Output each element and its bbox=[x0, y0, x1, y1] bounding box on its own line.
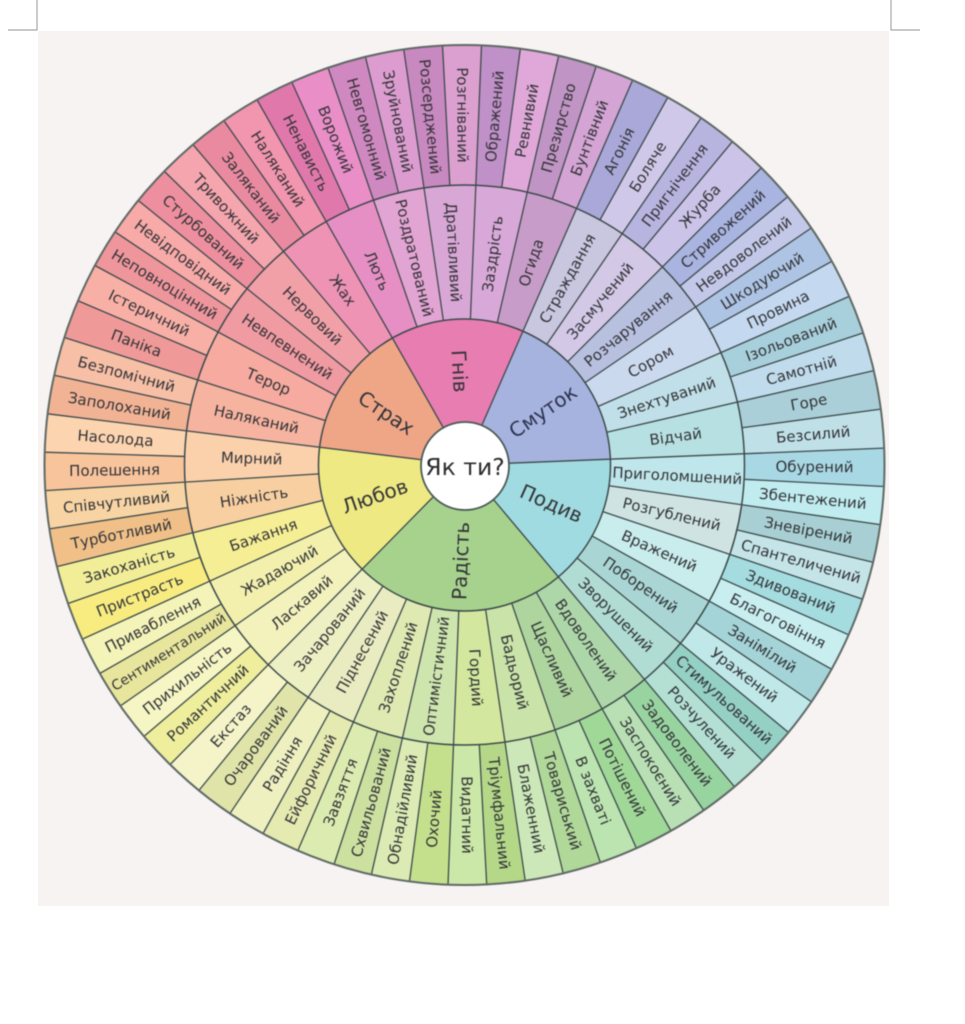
cell: Схвильований bbox=[334, 729, 409, 875]
cell: Невдоволений bbox=[676, 196, 812, 312]
cell: Бадьорий: Бадьорий bbox=[497, 633, 532, 712]
cell: Розчулений: Розчулений bbox=[664, 683, 739, 763]
sector: Любов bbox=[305, 404, 486, 574]
cell: Спантеличений bbox=[728, 523, 874, 600]
cell: Жадаючий bbox=[208, 514, 351, 627]
cell: Тривожний: Тривожний bbox=[188, 169, 263, 248]
cell: В захваті: В захваті bbox=[571, 754, 614, 827]
cell: Спантеличений: Спантеличений bbox=[739, 536, 863, 587]
cell: Стимульований: Стимульований bbox=[672, 652, 776, 748]
cell: Засмучений: Засмучений bbox=[563, 259, 637, 343]
cell: Ніжність: Ніжність bbox=[219, 483, 289, 512]
cell: Приголомшений bbox=[608, 446, 745, 506]
cell: Страждання bbox=[512, 207, 623, 351]
sector: Подив: Подив bbox=[516, 479, 586, 528]
cell: Видатний: Видатний bbox=[458, 776, 476, 854]
cell: Невдоволений: Невдоволений bbox=[693, 212, 795, 296]
cell: Невпевнений: Невпевнений bbox=[238, 310, 336, 384]
cell: Насолода bbox=[44, 413, 187, 463]
cell: Розчарування: Розчарування bbox=[581, 287, 676, 371]
cell: Нервовий bbox=[246, 250, 379, 382]
cell: Заспокоєний bbox=[596, 691, 704, 831]
cell: Провина: Провина bbox=[744, 287, 812, 333]
cell: Відчай: Відчай bbox=[648, 424, 703, 449]
cell: Журба: Журба bbox=[676, 180, 725, 232]
cell: Невгомонний bbox=[328, 56, 405, 202]
cell: Агонія bbox=[571, 80, 668, 223]
cell: Заляканий: Заляканий bbox=[218, 149, 284, 227]
cell: Істеричний: Істеричний bbox=[106, 286, 193, 340]
cell: Сором bbox=[579, 306, 722, 418]
cell: Ворожий: Ворожий bbox=[314, 103, 357, 176]
cell: Прихильність: Прихильність bbox=[139, 639, 235, 719]
cell: Товариський: Товариський bbox=[539, 749, 585, 852]
sector: Гнів bbox=[392, 316, 530, 468]
cell: Стимульований bbox=[659, 638, 789, 762]
cell: Презирство bbox=[521, 55, 597, 201]
cell: Обнадійливий: Обнадійливий bbox=[384, 753, 421, 866]
cell: Самотній bbox=[728, 333, 874, 409]
cell: Знехтуваний bbox=[594, 352, 739, 444]
cell: В захваті bbox=[549, 718, 637, 863]
cell: Потішений: Потішений bbox=[595, 735, 650, 820]
cell: Ейфоричний: Ейфоричний bbox=[281, 731, 341, 828]
cell: Заляканий bbox=[193, 120, 309, 256]
cell: Тріумфальний bbox=[472, 741, 526, 885]
middle ring of feelings bbox=[184, 184, 746, 746]
cell: Вражений bbox=[587, 500, 731, 602]
cell: Екстаз bbox=[169, 660, 293, 791]
sector: Смуток: Смуток bbox=[504, 380, 581, 443]
cell: Зневірений bbox=[736, 498, 881, 563]
cell: Обурений bbox=[744, 447, 885, 487]
cell: Очарований bbox=[198, 678, 314, 814]
cell: Стривожений: Стривожений bbox=[677, 186, 769, 272]
cell: Тріумфальний: Тріумфальний bbox=[484, 755, 514, 870]
cell: Вдоволений: Вдоволений bbox=[551, 596, 621, 685]
cell: Уражений bbox=[676, 617, 812, 733]
cell: Роздратований bbox=[373, 187, 456, 330]
cell: Безпомічний: Безпомічний bbox=[76, 353, 177, 396]
cell: Романтичний bbox=[143, 641, 273, 765]
cell: Невідповідний bbox=[115, 200, 251, 315]
cell: Неповноцінний bbox=[94, 232, 235, 338]
cell: Бунтівний bbox=[546, 66, 633, 211]
cell: Зруйнований: Зруйнований bbox=[379, 69, 417, 174]
cell: Романтичний: Романтичний bbox=[163, 661, 253, 746]
cell: Неповноцінний: Неповноцінний bbox=[108, 246, 221, 323]
cell: Турботливий bbox=[49, 501, 194, 567]
cell: Завзяття bbox=[297, 720, 384, 865]
cell: Заздрість bbox=[458, 184, 528, 324]
cell: Роздратований: Роздратований bbox=[391, 197, 437, 319]
cell: Огида: Огида bbox=[515, 237, 548, 289]
cell: Зневірений: Зневірений bbox=[763, 513, 854, 548]
cell: Співчутливий: Співчутливий bbox=[62, 488, 171, 517]
cell: Видатний bbox=[447, 745, 487, 885]
cell: Ізольований bbox=[719, 296, 864, 383]
outer ring of feelings bbox=[44, 45, 885, 885]
cell: Ейфоричний bbox=[262, 708, 360, 851]
cell: Захоплений bbox=[353, 595, 444, 739]
cell: Розгніваний: Розгніваний bbox=[453, 67, 472, 163]
cell: Страждання: Страждання bbox=[536, 231, 600, 327]
sector: Страх bbox=[307, 329, 501, 520]
cell: Ненависть bbox=[257, 82, 355, 225]
background panel bbox=[38, 31, 889, 906]
cell: Ласкавий bbox=[234, 539, 371, 666]
cell: Ізольований: Ізольований bbox=[743, 314, 840, 365]
cell: Ніжність bbox=[184, 461, 325, 534]
cell: Заспокоєний: Заспокоєний bbox=[616, 714, 685, 809]
cell: Потішений bbox=[573, 706, 672, 849]
cell: Задоволений bbox=[618, 675, 735, 811]
cell: Оптимістичний: Оптимістичний bbox=[420, 615, 453, 737]
sector: Радість: Радість bbox=[447, 521, 474, 600]
cell: Лють: Лють bbox=[360, 248, 394, 293]
cell: Приголомшений: Приголомшений bbox=[612, 464, 743, 488]
cell: Завзяття: Завзяття bbox=[320, 756, 362, 829]
cell: Співчутливий bbox=[45, 475, 189, 529]
crop mark: top right bbox=[891, 0, 920, 30]
cell: Радіння bbox=[229, 694, 336, 834]
cell: Благоговіння: Благоговіння bbox=[727, 590, 829, 652]
sector: Радість bbox=[361, 461, 563, 615]
cell: Жах: Жах bbox=[325, 271, 360, 310]
cell: Захоплений: Захоплений bbox=[375, 620, 422, 715]
sector: Гнів: Гнів bbox=[446, 349, 473, 393]
cell: Вдоволений bbox=[526, 569, 646, 710]
cell: Задоволений: Задоволений bbox=[638, 696, 716, 790]
cell: Стурбований: Стурбований bbox=[159, 191, 248, 273]
cell: Здивований bbox=[718, 548, 863, 636]
cell: Радіння: Радіння bbox=[259, 733, 306, 795]
cell: Бажання: Бажання bbox=[227, 515, 300, 555]
cell: Заздрість: Заздрість bbox=[479, 215, 507, 293]
cell: Дратівливий bbox=[424, 184, 483, 321]
inner ring of core emotions bbox=[305, 316, 629, 615]
cell: Жах bbox=[283, 220, 403, 361]
cell: Поборений bbox=[570, 525, 711, 645]
cell: Товариський bbox=[524, 728, 601, 874]
cell: Безсилий: Безсилий bbox=[775, 422, 851, 447]
cell: Пристрасть bbox=[67, 551, 212, 640]
cell: Горе bbox=[736, 370, 881, 434]
cell: Приваблення bbox=[82, 575, 225, 674]
cell: Невгомонний: Невгомонний bbox=[343, 76, 390, 182]
cell: Охочий bbox=[409, 742, 460, 885]
cell: Безпомічний bbox=[54, 337, 199, 412]
cell: Прихильність bbox=[120, 620, 255, 737]
cell: Щасливий: Щасливий bbox=[527, 618, 577, 700]
cell: Щасливий bbox=[500, 587, 603, 731]
cell: Піднесений: Піднесений bbox=[332, 607, 392, 696]
cell: Огида bbox=[485, 191, 577, 335]
crop mark: top left bbox=[8, 0, 37, 30]
cell: Охочий: Охочий bbox=[423, 789, 446, 848]
cell: Наляканий (middle): Наляканий bbox=[212, 401, 301, 438]
cell: Вражений: Вражений bbox=[619, 527, 700, 576]
cell: Боляче: Боляче bbox=[626, 138, 670, 196]
cell: Терор: Терор bbox=[243, 364, 293, 399]
cell: Пристрасть: Пристрасть bbox=[94, 570, 186, 621]
cell: Шкодуючий: Шкодуючий bbox=[717, 249, 807, 314]
cell: Заполоханий: Заполоханий bbox=[67, 389, 172, 424]
cell: Обнадійливий bbox=[371, 737, 435, 882]
cell: Невідповідний: Невідповідний bbox=[131, 216, 235, 299]
cell: Зачарований bbox=[267, 561, 393, 699]
cell: Бадьорий bbox=[473, 600, 556, 743]
sector: Любов: Любов bbox=[339, 474, 411, 519]
feelings wheel bbox=[44, 45, 885, 885]
cell: Жадаючий: Жадаючий bbox=[238, 542, 321, 600]
cell: Ображений: Ображений bbox=[482, 70, 508, 163]
cell: Сентиментальний: Сентиментальний bbox=[109, 610, 229, 695]
cell: Невпевнений bbox=[217, 288, 358, 406]
cell: Очарований: Очарований bbox=[220, 702, 292, 790]
cell: Збентежений: Збентежений bbox=[758, 485, 867, 513]
cell: Наляканий (outer) bbox=[224, 99, 332, 239]
cell: Блаженний: Блаженний bbox=[514, 762, 548, 855]
cell: Бунтівний: Бунтівний bbox=[567, 98, 612, 179]
cell: Самотній: Самотній bbox=[764, 352, 839, 389]
cell: Гордий bbox=[446, 609, 506, 746]
cell: Уражений: Уражений bbox=[707, 644, 782, 706]
cell: Розгублений bbox=[600, 473, 743, 555]
cell: Розгніваний bbox=[442, 45, 483, 185]
cell: Занімілий bbox=[692, 595, 832, 703]
cell: Тривожний bbox=[164, 144, 288, 274]
cell: Журба bbox=[638, 141, 762, 271]
cell: Горе: Горе bbox=[789, 390, 829, 415]
center hub: Як ти?: Як ти? bbox=[425, 453, 505, 481]
cell: Презирство: Презирство bbox=[538, 81, 580, 175]
cell: Паніка: Паніка bbox=[109, 326, 164, 361]
cell: Розсерджений: Розсерджений bbox=[415, 58, 445, 175]
cell: Відчай bbox=[605, 402, 746, 472]
cell: Безсилий bbox=[741, 409, 885, 460]
cell: Збентежений bbox=[741, 472, 884, 525]
cell: Пригнічення bbox=[617, 117, 733, 253]
cell: Істеричний bbox=[77, 265, 221, 362]
cell: Пригнічення: Пригнічення bbox=[638, 140, 712, 230]
cell: Агонія: Агонія bbox=[600, 125, 639, 178]
cell: Занімілий: Занімілий bbox=[725, 621, 800, 677]
cell: Розсерджений bbox=[403, 45, 457, 189]
cell: Засмучений bbox=[537, 233, 663, 370]
cell: Провина bbox=[706, 261, 850, 359]
cell: Зачарований: Зачарований bbox=[290, 584, 369, 676]
cell: Закоханість: Закоханість bbox=[81, 543, 177, 587]
cell: Гордий: Гордий bbox=[465, 648, 486, 707]
cell: Стурбований bbox=[138, 171, 269, 294]
cell: Паніка bbox=[64, 300, 209, 386]
cell: Наляканий (middle) bbox=[185, 379, 328, 460]
cell: Оптимістичний bbox=[402, 606, 472, 746]
sector: Смуток bbox=[421, 319, 629, 529]
cell: Зворушений bbox=[549, 549, 682, 681]
cell: Сором: Сором bbox=[625, 342, 677, 382]
cell: Закоханість bbox=[56, 526, 202, 604]
cell: Блаженний bbox=[498, 736, 564, 881]
cell: Благоговіння bbox=[706, 572, 849, 670]
cell: Обурений: Обурений bbox=[775, 458, 854, 476]
cell: Полешення bbox=[44, 449, 185, 491]
cell: Бажання bbox=[191, 488, 336, 582]
cell: Здивований: Здивований bbox=[743, 566, 838, 617]
cell: Полешення: Полешення bbox=[69, 461, 160, 480]
sector: Страх: Страх bbox=[354, 386, 419, 440]
cell: Мирний: Мирний bbox=[221, 449, 283, 468]
cell: Заполоханий bbox=[47, 375, 192, 438]
cell: Приваблення: Приваблення bbox=[102, 593, 204, 657]
cell: Сентиментальний bbox=[99, 598, 239, 707]
cell: Ворожий bbox=[291, 67, 380, 212]
cell: Знехтуваний: Знехтуваний bbox=[615, 373, 718, 423]
cell: Зворушений: Зворушений bbox=[574, 574, 657, 656]
cell: Піднесений bbox=[307, 580, 418, 723]
cell: Шкодуючий bbox=[692, 228, 832, 335]
cell: Насолода: Насолода bbox=[77, 426, 154, 450]
cell: Дратівливий: Дратівливий bbox=[442, 202, 465, 303]
cell: Схвильований: Схвильований bbox=[348, 746, 395, 859]
cell: Зруйнований bbox=[365, 49, 431, 194]
center hub: Як ти? bbox=[421, 422, 509, 510]
cell: Мирний bbox=[184, 430, 320, 487]
cell: Ревнивий bbox=[495, 48, 559, 193]
cell: Ревнивий: Ревнивий bbox=[512, 82, 543, 159]
cell: Терор bbox=[196, 331, 341, 432]
cell: Ласкавий: Ласкавий bbox=[267, 571, 336, 634]
cell: Розчарування bbox=[560, 266, 697, 392]
cell: Наляканий (outer): Наляканий bbox=[247, 128, 308, 210]
sector: Подив bbox=[438, 406, 624, 583]
cell: Розгублений: Розгублений bbox=[621, 494, 723, 535]
cell: Розчулений bbox=[639, 657, 763, 787]
cell: Боляче bbox=[594, 97, 701, 237]
cell: Ображений bbox=[469, 45, 521, 188]
cell: Нервовий: Нервовий bbox=[279, 283, 346, 349]
cell: Ненависть: Ненависть bbox=[279, 111, 333, 194]
cell: Поборений: Поборений bbox=[599, 553, 681, 617]
cell: Екстаз: Екстаз bbox=[207, 700, 255, 751]
cell: Турботливий: Турботливий bbox=[68, 515, 173, 553]
cell: Лють bbox=[325, 199, 429, 343]
cell: Стривожений bbox=[658, 167, 788, 291]
